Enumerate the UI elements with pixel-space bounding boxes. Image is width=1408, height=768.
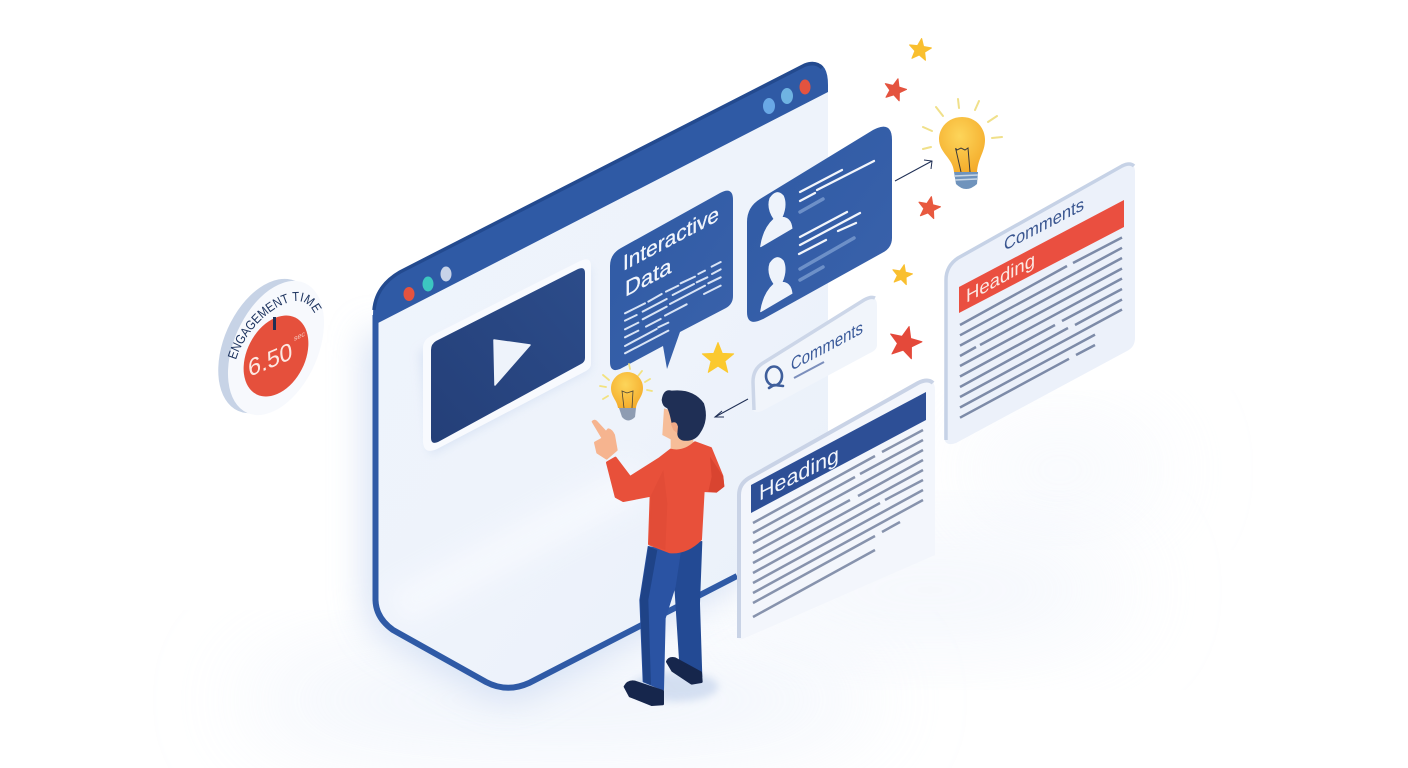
star: red lower: [886, 323, 925, 360]
dial value: 6.50: [247, 337, 294, 383]
bulb base: [954, 172, 978, 189]
article text lines: [960, 238, 1122, 418]
play icon: [494, 340, 530, 385]
heading article body: [737, 380, 935, 639]
article label: Comments: [1004, 194, 1084, 256]
article red heading band: [959, 200, 1124, 313]
comments underline: [794, 362, 824, 378]
video frame shadow: [420, 266, 590, 455]
comments box border: [753, 297, 875, 410]
arrow: profiles to bulb: [895, 160, 932, 181]
bulb glass: [939, 117, 985, 172]
window dots right: [763, 80, 810, 114]
person near leg: [640, 547, 680, 690]
arrow: comments to person: [715, 399, 748, 417]
browser window: [373, 63, 828, 691]
heading article title: Heading: [759, 441, 839, 506]
video player: [420, 259, 591, 455]
icon: small light bulb: [600, 364, 652, 420]
window left and bottom border: [376, 315, 737, 688]
article body: [944, 164, 1135, 444]
heading article border: [739, 380, 933, 638]
dial red centre: [231, 305, 321, 407]
dial tick: [273, 317, 276, 330]
heading article text lines: [753, 430, 923, 617]
dial side: [199, 264, 335, 428]
star: red upper: [882, 76, 909, 102]
article heading text: Heading: [966, 249, 1035, 308]
heading article blue band: [751, 392, 926, 513]
window title bar: [373, 63, 828, 325]
panel: comments article: [944, 164, 1135, 444]
star: red middle: [916, 194, 942, 219]
person ear: [671, 422, 678, 433]
small bulb filament: [622, 391, 633, 408]
window panel: [373, 63, 828, 691]
search icon: [766, 366, 783, 388]
dial face: [209, 266, 343, 430]
person figure: [593, 390, 724, 705]
panel: heading article: [737, 380, 935, 639]
small bulb rays: [600, 364, 652, 399]
panel: comments search box: [752, 297, 877, 412]
person neck and face: [662, 408, 693, 453]
bubble subtitle: Data: [625, 252, 672, 302]
engagement time dial: [218, 278, 322, 414]
person shoes: [625, 658, 701, 705]
article border: [946, 164, 1134, 440]
comments label: Comments: [791, 318, 863, 376]
background soft shadows: [240, 330, 1160, 745]
panel: interactive data bubble: [610, 191, 733, 370]
person arm shading: [708, 457, 724, 493]
video frame: [423, 259, 591, 451]
person torso shading: [649, 470, 667, 550]
title bar top edge: [374, 64, 822, 310]
person far leg: [675, 542, 702, 677]
person hair: [662, 390, 706, 441]
window light band: [395, 480, 640, 610]
profiles body: [747, 127, 892, 322]
bulb rays: [923, 99, 1002, 149]
small bulb glass: [611, 372, 643, 408]
star: yellow lower: [890, 263, 914, 285]
star: yellow large: [702, 342, 734, 372]
profile text lines: [799, 161, 874, 280]
bubble body: [610, 191, 733, 370]
person hand: [593, 421, 617, 459]
panel: user profiles: [747, 127, 892, 322]
window dots left: [404, 266, 452, 301]
bubble text lines: [625, 262, 721, 353]
star: yellow top: [908, 37, 932, 61]
profile avatar 2: [761, 258, 792, 312]
video screen: [431, 268, 585, 443]
person ground shadow: [632, 672, 718, 702]
icon: large light bulb: [923, 99, 1002, 189]
bulb filament: [956, 148, 970, 172]
dial unit: sec: [294, 329, 305, 343]
person near leg shading: [640, 547, 657, 685]
profile avatar 1: [761, 193, 792, 247]
dial arc label: ENGAGEMENT TIME: [228, 292, 322, 360]
comments box body: [752, 298, 877, 412]
small bulb base: [619, 408, 636, 420]
person shirt: [607, 443, 723, 552]
bubble title: Interactive: [623, 200, 719, 276]
